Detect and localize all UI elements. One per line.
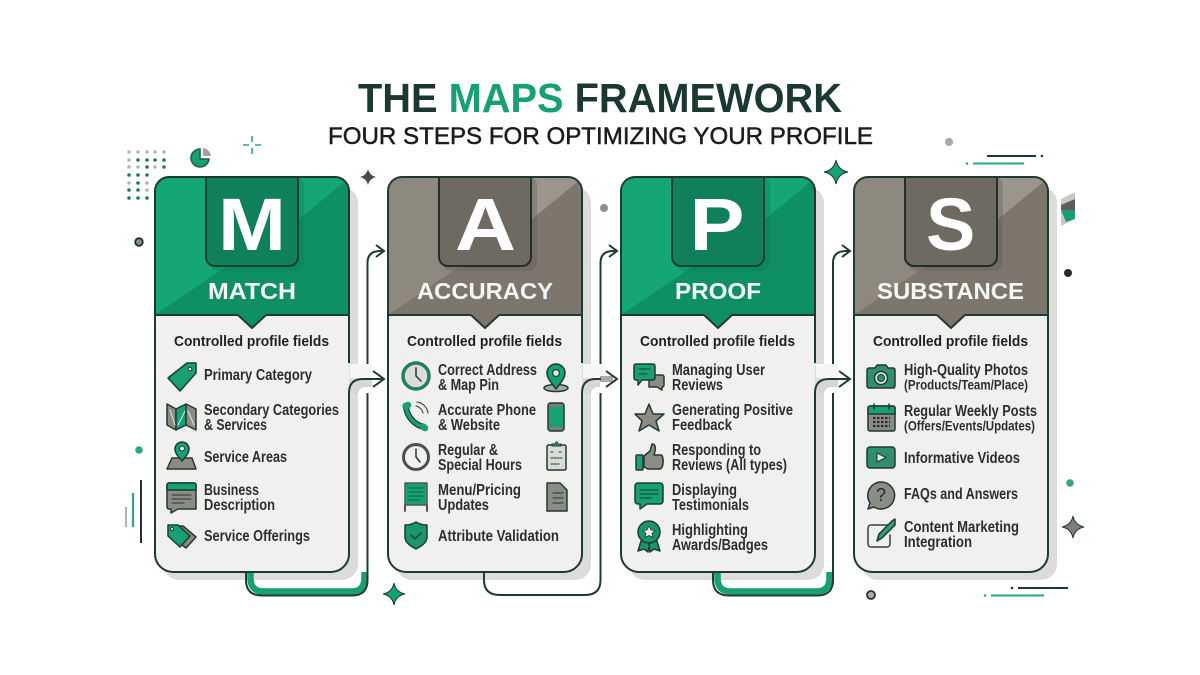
text: menu pricing: Menu/Pricing [438, 482, 521, 499]
connector: match to accuracy top route [246, 245, 384, 596]
text: menu pricing: Updates [438, 497, 489, 514]
icon: green clock [403, 363, 429, 389]
icon: document [547, 483, 567, 511]
connector: accuracy bottom route [484, 245, 617, 595]
text: secondary categories: Secondary Categories [204, 402, 339, 419]
icon: folded map [167, 404, 196, 430]
accuracy outline [388, 177, 582, 572]
text: regular hours: Special Hours [438, 457, 522, 474]
decoration: gray dot [600, 204, 608, 212]
accuracy fields label: Controlled profile fields [407, 333, 562, 350]
icon: smartphone [548, 403, 564, 431]
substance heading: SUBSTANCE [877, 278, 1024, 304]
icon: camera [867, 365, 895, 388]
text: service areas: Service Areas [204, 449, 287, 466]
icon: business description [167, 483, 196, 513]
decoration: green dot [1066, 479, 1074, 487]
proof heading: PROOF [675, 278, 761, 304]
proof letter: P [690, 183, 744, 266]
connector: proof bottom route [713, 245, 850, 596]
text: correct address [438, 362, 537, 394]
icon: clipboard [547, 442, 566, 470]
decoration: bottom right lines [984, 587, 1068, 597]
text: generating feedback: Feedback [672, 417, 732, 434]
decoration: dark dot [1064, 269, 1072, 277]
decoration: right facet shape [1061, 192, 1075, 226]
text: secondary categories [204, 402, 339, 434]
text: generating feedback [672, 402, 793, 434]
match header [155, 170, 349, 315]
text: managing reviews [672, 362, 765, 394]
text: regular weekly posts: (Offers/Events/Updates) [904, 418, 1035, 434]
match letter: M [218, 183, 286, 266]
text: content marketing [904, 519, 1019, 551]
icon: menu board [405, 483, 427, 511]
decoration: dot grid [127, 150, 166, 200]
match heading: MATCH [208, 278, 296, 304]
match fields label: Controlled profile fields [174, 333, 329, 350]
icon: testimonial bubble [635, 483, 663, 509]
text: menu pricing [438, 482, 521, 514]
match outline [155, 177, 349, 572]
text: regular weekly posts [904, 403, 1037, 434]
icon: service area pin [167, 442, 196, 469]
decoration: ring [135, 238, 143, 246]
icon: gray clock [404, 444, 428, 470]
connector: proof to substance mid arrow [815, 364, 850, 395]
icon: phone call [406, 402, 428, 428]
decoration: star dark [360, 169, 376, 185]
icon: thumbs up [636, 444, 663, 470]
text: primary category: Primary Category [204, 367, 312, 384]
text: displaying testimonials: Displaying [672, 482, 737, 499]
connector: match to accuracy mid arrow [349, 364, 384, 395]
text: business description [204, 482, 275, 514]
text: responding reviews: Responding to [672, 442, 761, 459]
text: high quality photos: High-Quality Photos [904, 362, 1028, 379]
text: responding reviews: Reviews (All types) [672, 457, 787, 474]
decoration: gray star [1062, 516, 1084, 538]
text: accurate phone: & Website [438, 417, 500, 434]
decoration: plus sparkle [243, 136, 261, 154]
panel: accuracy [388, 170, 582, 572]
icon: edit pencil [868, 519, 895, 547]
text: informative videos: Informative Videos [904, 450, 1020, 467]
icon: calendar [868, 404, 895, 431]
connector: accuracy to proof mid arrow [582, 364, 617, 395]
text: business description: Business [204, 482, 259, 499]
icon: faq bubble [868, 482, 895, 509]
icon: service offerings tags [168, 525, 196, 548]
text: regular hours: Regular & [438, 442, 498, 459]
text: regular weekly posts: Regular Weekly Posts [904, 403, 1037, 420]
text: generating feedback: Generating Positive [672, 402, 793, 419]
accuracy heading: ACCURACY [417, 278, 553, 304]
decoration: left green dot [135, 446, 143, 454]
text: displaying testimonials: Testimonials [672, 497, 749, 514]
decoration: ring bottom [867, 591, 875, 599]
decoration: pie icon [191, 148, 211, 167]
decoration: gray dot top right [945, 138, 953, 146]
accuracy letter: A [455, 183, 516, 266]
icon: primary category tag [168, 363, 196, 391]
text: highlighting awards [672, 522, 768, 554]
text: high quality photos [904, 362, 1028, 392]
proof outline [621, 177, 815, 572]
icon: award badge [638, 521, 660, 552]
substance outline [854, 177, 1048, 572]
text: content marketing: Integration [904, 534, 972, 551]
icon: map pin [544, 364, 568, 392]
text: faqs: FAQs and Answers [904, 486, 1018, 503]
card shadows [163, 187, 1057, 580]
substance letter: S [926, 183, 975, 266]
icon: faq bubble: ? [876, 485, 886, 505]
icon: star [635, 404, 664, 431]
proof header [621, 170, 815, 315]
decoration: green star [824, 160, 848, 184]
decoration: top right lines [966, 155, 1043, 165]
panel: substance [854, 170, 1048, 572]
match pointer [238, 315, 266, 328]
panel: proof [621, 170, 815, 572]
text: regular hours [438, 442, 522, 474]
text: content marketing: Content Marketing [904, 519, 1019, 536]
text: highlighting awards: Highlighting [672, 522, 748, 539]
decoration: bottom green star [383, 583, 405, 605]
decoration: left vertical lines [126, 480, 141, 543]
text: business description: Description [204, 497, 275, 514]
text: service offerings: Service Offerings [204, 528, 310, 545]
substance header [854, 170, 1048, 315]
panel: match [155, 170, 349, 572]
text: accurate phone: Accurate Phone [438, 402, 536, 419]
text: correct address: & Map Pin [438, 377, 499, 394]
text: high quality photos: (Products/Team/Place) [904, 378, 1028, 392]
text: secondary categories: & Services [204, 417, 267, 434]
title: THE MAPS FRAMEWORK [358, 75, 842, 121]
accuracy header [388, 170, 582, 315]
substance pointer [937, 315, 965, 328]
icon: chat bubbles [634, 364, 664, 390]
text: responding reviews [672, 442, 787, 474]
text: highlighting awards: Awards/Badges [672, 537, 768, 554]
accuracy pointer [471, 315, 499, 328]
text: attribute validation: Attribute Validation [438, 528, 559, 545]
text: displaying testimonials [672, 482, 749, 514]
text: managing reviews: Managing User [672, 362, 765, 379]
text: accurate phone [438, 402, 536, 434]
subtitle: FOUR STEPS FOR OPTIMIZING YOUR PROFILE [328, 123, 873, 150]
substance fields label: Controlled profile fields [873, 333, 1028, 350]
proof pointer [704, 315, 732, 328]
text: correct address: Correct Address [438, 362, 537, 379]
icon: video [867, 447, 895, 468]
proof fields label: Controlled profile fields [640, 333, 795, 350]
text: managing reviews: Reviews [672, 377, 723, 394]
icon: shield [405, 522, 427, 549]
